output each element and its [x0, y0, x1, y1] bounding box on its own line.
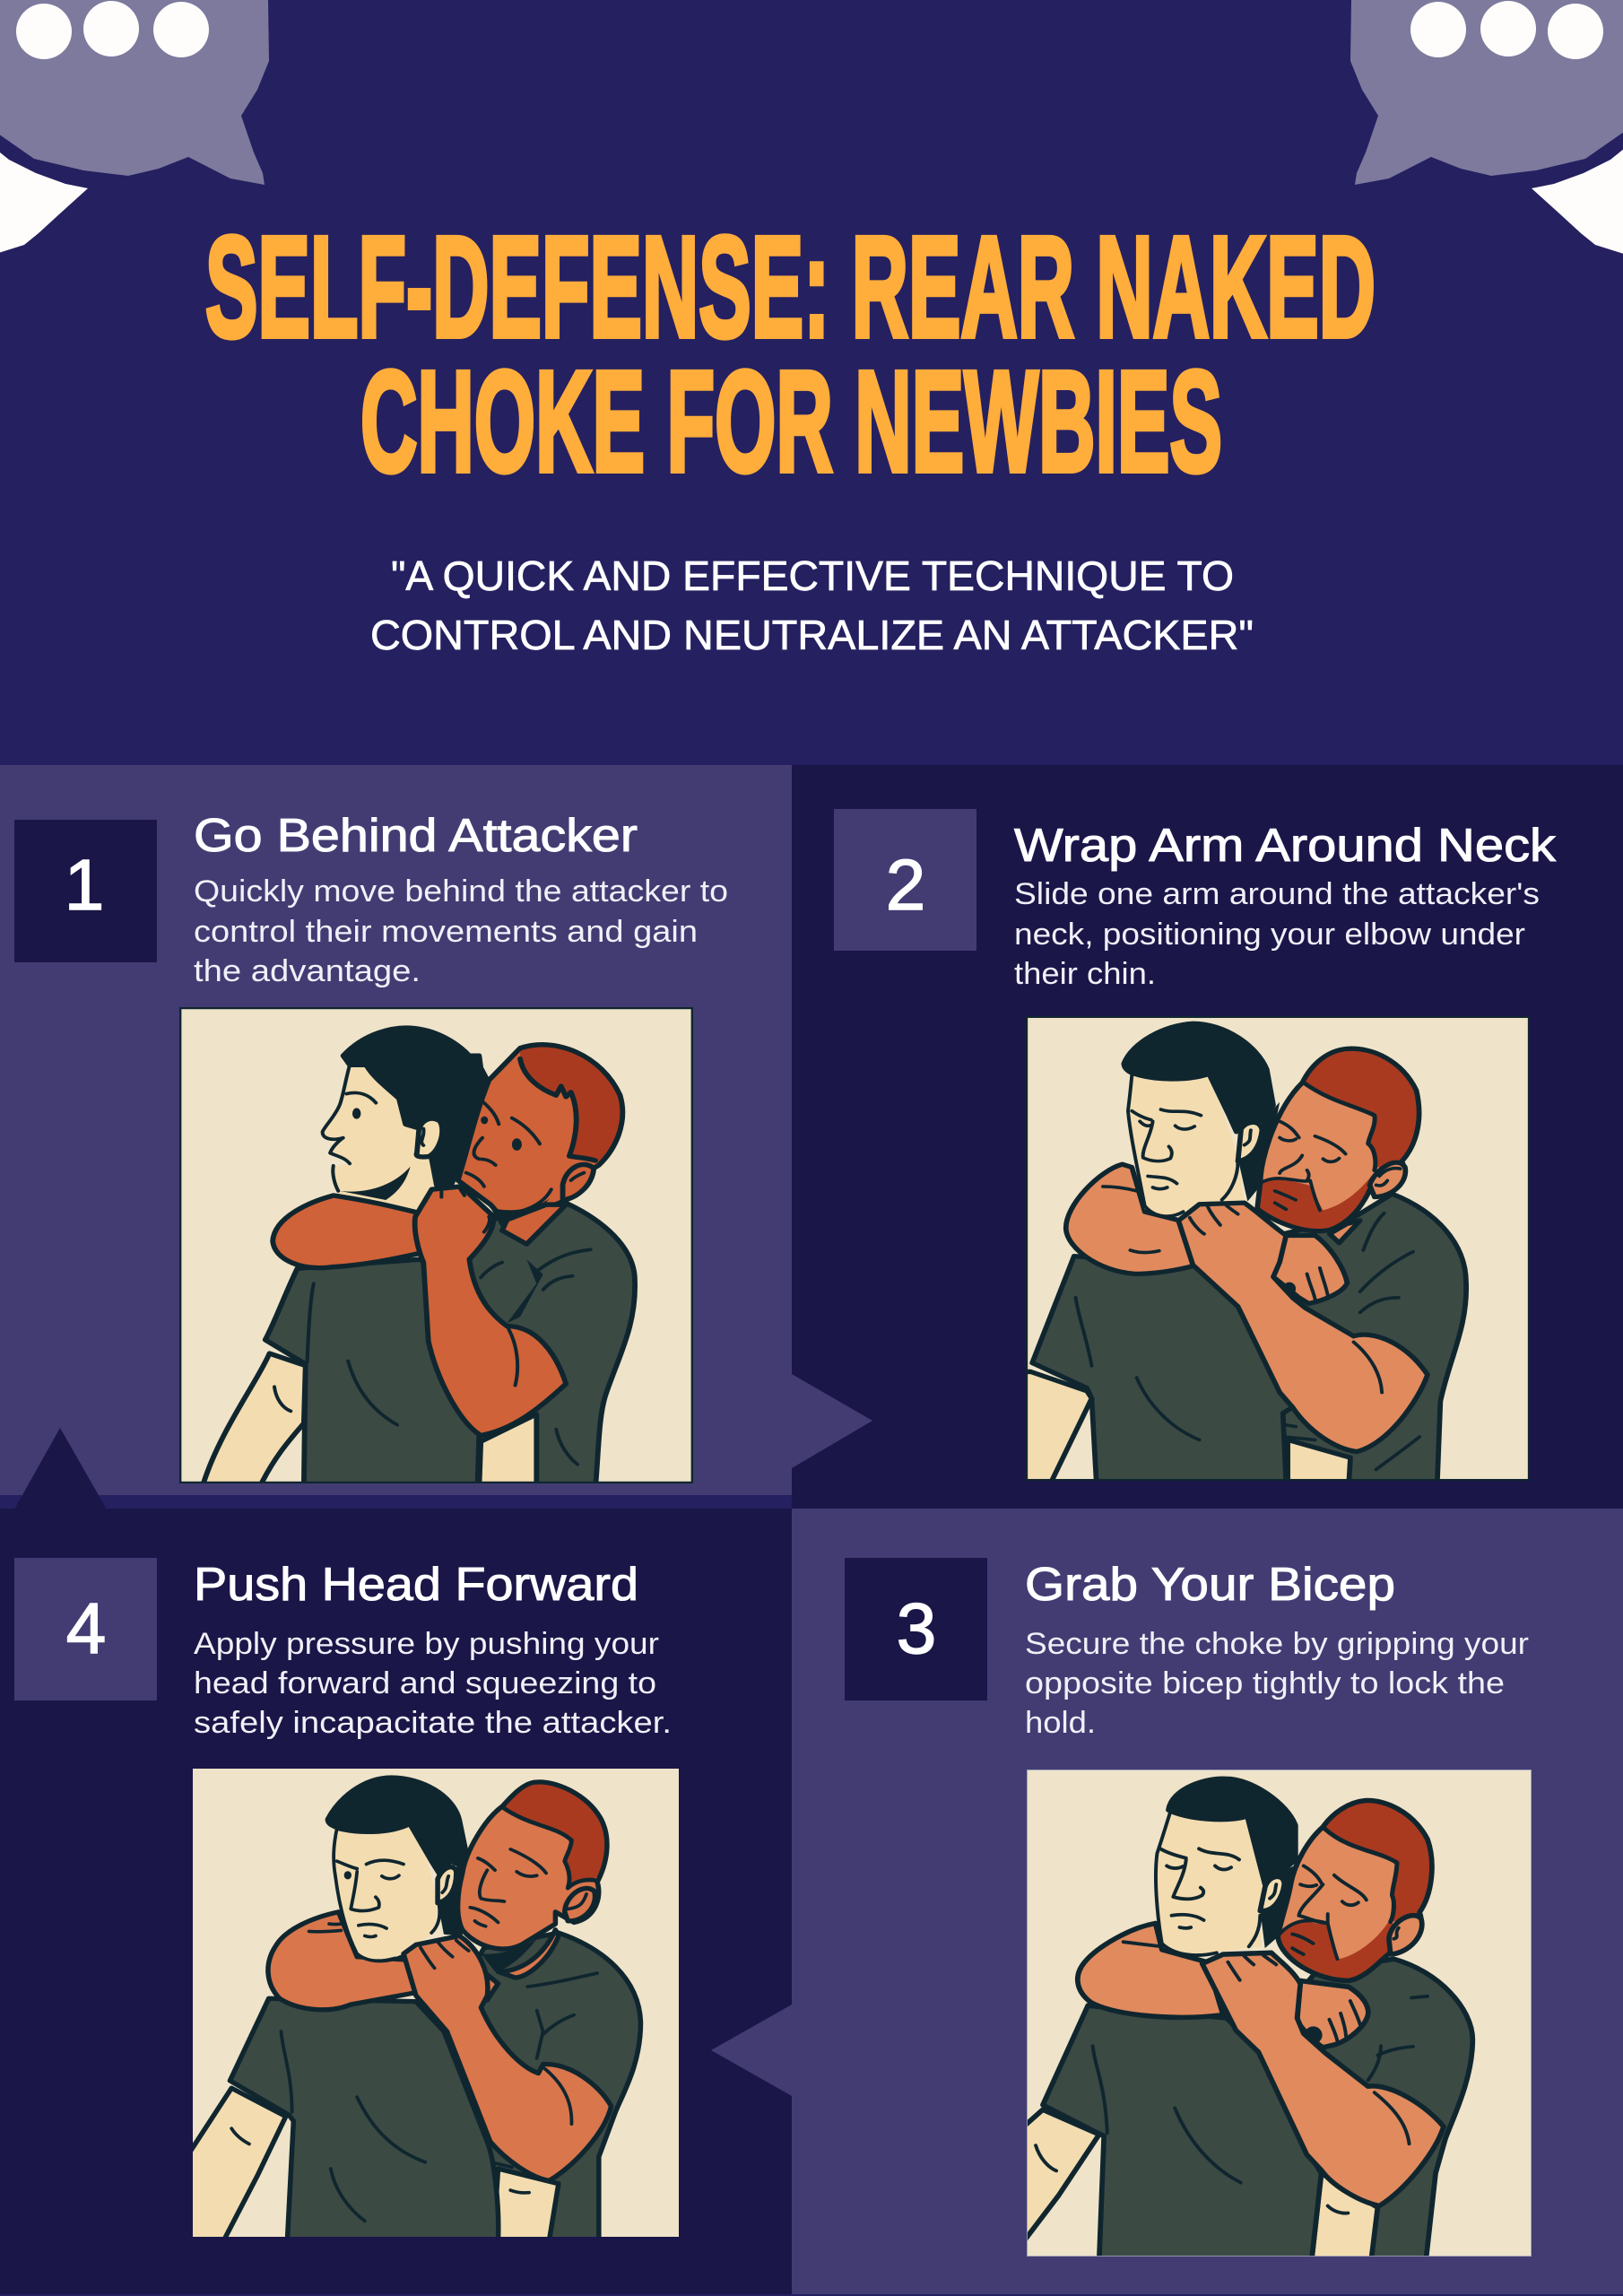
badge: number 4: 4 [66, 1588, 106, 1668]
text: step 3 description: hold. [1025, 1706, 1096, 1740]
heading: step 3: Grab Your Bicep [1025, 1559, 1395, 1611]
badge: number 3 [845, 1558, 987, 1700]
text: step 3 description [1025, 1627, 1529, 1740]
badge: number 4 [14, 1558, 157, 1700]
badge: number 2 [834, 809, 976, 951]
illustration: step 2 [1026, 1016, 1530, 1481]
panel: step 2 background [792, 765, 1623, 1509]
subtitle [370, 552, 1254, 658]
badge: number 1: 1 [65, 845, 104, 925]
arms [1298, 1980, 1368, 2048]
text: step 4 description: Apply pressure by pushing your [194, 1627, 659, 1661]
arrow: step 1 to step 2 [792, 1374, 872, 1468]
text: step 2 description [1014, 877, 1540, 991]
panel: step 1 background [0, 765, 792, 1495]
heading: step 2: Wrap Arm Around Neck [1014, 820, 1557, 872]
rear man head [458, 1045, 622, 1220]
front man head [1129, 1073, 1245, 1216]
rear man head [1278, 1800, 1432, 1980]
text: step 4 description [194, 1627, 672, 1740]
illustration: step 4 [193, 1769, 679, 2237]
text: step 1 description: Quickly move behind the attacker to [194, 874, 728, 909]
rear man head [1257, 1048, 1419, 1231]
arrow: step 3 to step 4 [711, 2005, 792, 2096]
panel: step 4 background [0, 1509, 792, 2294]
text: step 2 description: their chin. [1014, 957, 1156, 991]
front man head [334, 1822, 438, 1959]
text: step 1 description: control their movements and gain [194, 915, 698, 949]
text: step 1 description: the advantage. [194, 954, 421, 988]
text: step 2 description: neck, positioning your elbow under [1014, 918, 1525, 952]
subtitle: "A QUICK AND EFFECTIVE TECHNIQUE TO [391, 552, 1234, 599]
illustration: step 1 [179, 1007, 693, 1483]
text: step 1 description [194, 874, 728, 988]
arm [502, 1205, 566, 1244]
illustration: step 3 [1027, 1770, 1532, 2257]
title [205, 206, 1376, 501]
heading: step 1: Go Behind Attacker [194, 810, 638, 862]
forearm loop [1078, 1923, 1223, 2017]
panel: step 3 background [792, 1509, 1623, 2294]
text: step 2 description: Slide one arm around the attacker's [1014, 877, 1540, 911]
forearm loop [268, 1912, 416, 2010]
badge: number 1 [14, 820, 157, 962]
forearm loop [1066, 1164, 1196, 1274]
front man head [1156, 1813, 1266, 1954]
arms [1330, 1221, 1360, 1243]
hand and arm [487, 1975, 498, 2000]
subtitle: CONTROL AND NEUTRALIZE AN ATTACKER" [370, 612, 1254, 658]
icon: right speech bubbles [1350, 0, 1623, 254]
badge: number 2: 2 [886, 845, 925, 925]
text: step 4 description: head forward and squeezing to [194, 1666, 656, 1700]
text: step 3 description: Secure the choke by gripping your [1025, 1627, 1529, 1661]
text: step 4 description: safely incapacitate the attacker. [194, 1706, 672, 1740]
badge: number 3: 3 [897, 1588, 936, 1668]
front man head [324, 1065, 438, 1213]
text: step 3 description: opposite bicep tightly to lock the [1025, 1666, 1505, 1700]
rear man head [458, 1782, 607, 1949]
arrow: step 4 to step 1 [14, 1428, 107, 1509]
icon: left speech bubbles [0, 0, 269, 254]
heading: step 4: Push Head Forward [194, 1559, 638, 1611]
